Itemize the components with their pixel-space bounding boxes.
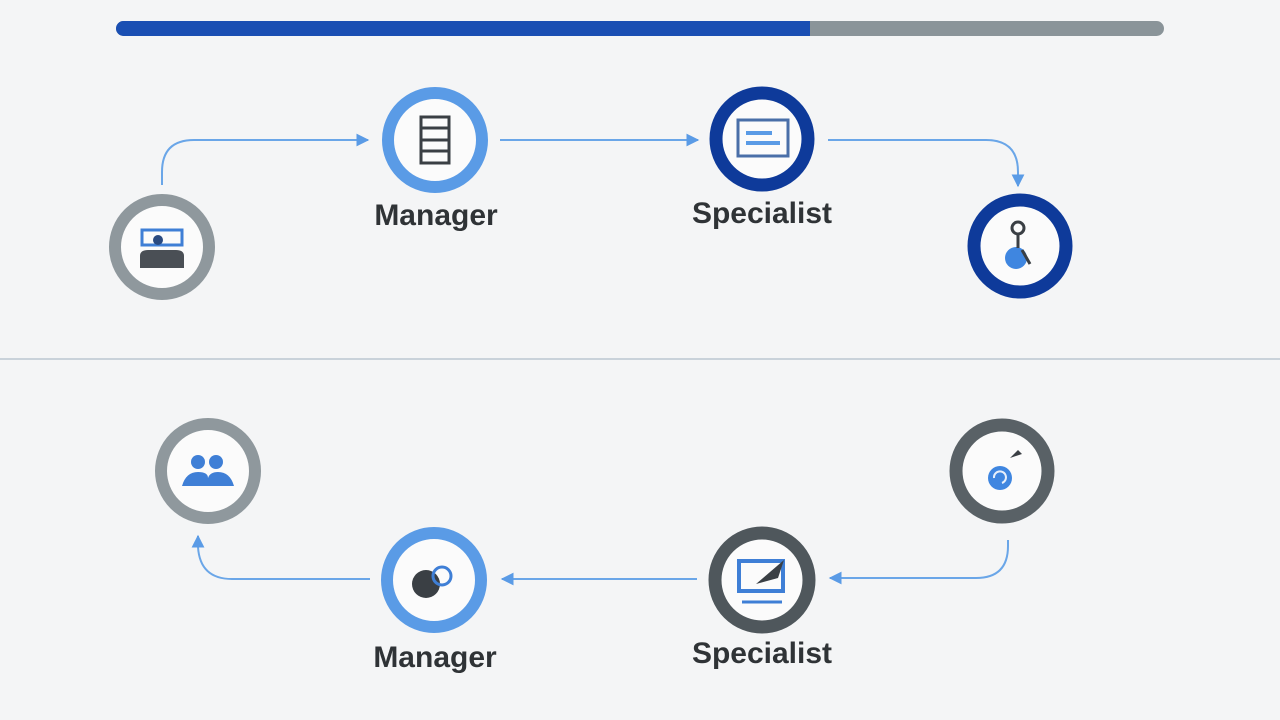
arrow: start to manager: [162, 140, 368, 185]
arrow: manager to specialist: [500, 139, 698, 141]
arrow: specialist to end: [828, 140, 1018, 186]
label: Specialist top: Specialist: [692, 197, 832, 230]
label: Specialist bottom: Specialist: [692, 637, 832, 670]
node: bottom end: [956, 425, 1048, 517]
label: Manager top: Manager: [374, 199, 498, 232]
arrow: end to specialist bottom: [830, 540, 1008, 578]
node: top start: [115, 200, 209, 294]
arrow: manager to start bottom: [198, 536, 370, 579]
arrow: specialist to manager bottom: [502, 578, 697, 580]
node: bottom specialist: [715, 533, 809, 627]
node: bottom manager: [387, 533, 481, 627]
label: Manager bottom: Manager: [373, 641, 497, 674]
node: top end: [974, 200, 1066, 292]
node: top manager: [388, 93, 482, 187]
progress bar: [116, 21, 1164, 36]
node: top specialist: [716, 93, 808, 185]
divider: [0, 358, 1280, 360]
node: bottom start: [161, 424, 255, 518]
